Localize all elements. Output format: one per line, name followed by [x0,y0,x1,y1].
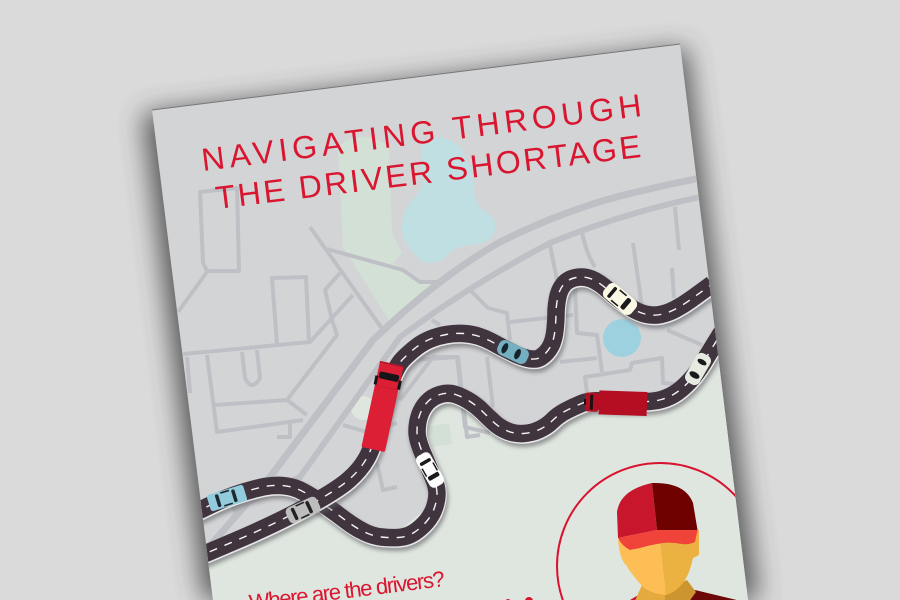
car: pale green-white at right edge [685,352,711,386]
title line 2: THE DRIVER SHORTAGE [213,128,643,216]
car: teal on upper road [497,340,529,364]
car: grey, at crossing [286,496,320,524]
lake [402,137,495,263]
driver shoulder [690,590,736,600]
park: green strip [338,136,430,322]
street grid [178,188,702,490]
car: cream on upper road [602,283,638,315]
driver face [618,530,699,595]
next-line text tops (red dots) [505,597,533,600]
light green lower area [200,330,760,600]
title line 1: NAVIGATING THROUGH [199,87,643,178]
car: white on lower road loop [416,452,444,488]
cap crown right [652,483,698,530]
road 1: upper winding road [195,277,714,562]
truck: bright red [360,361,405,452]
paper top edge [152,44,680,110]
driver collar red [630,596,638,600]
title [199,87,643,216]
map artwork [178,136,763,600]
driver figure [617,483,745,600]
car: light blue, lower left [206,484,248,512]
pond [603,319,641,357]
driver portrait ring [556,462,736,600]
driver neck [634,580,696,600]
small green square [429,423,452,447]
paper shadow [143,48,758,600]
paper sheet [152,44,748,600]
small green round patch [352,396,372,420]
cap crown left [617,483,657,538]
road 2: lower winding road [192,332,724,542]
truck: dark red [584,390,647,416]
cap brim [618,530,698,550]
highways [208,178,700,548]
scene: brochure on grey background [128,32,774,600]
